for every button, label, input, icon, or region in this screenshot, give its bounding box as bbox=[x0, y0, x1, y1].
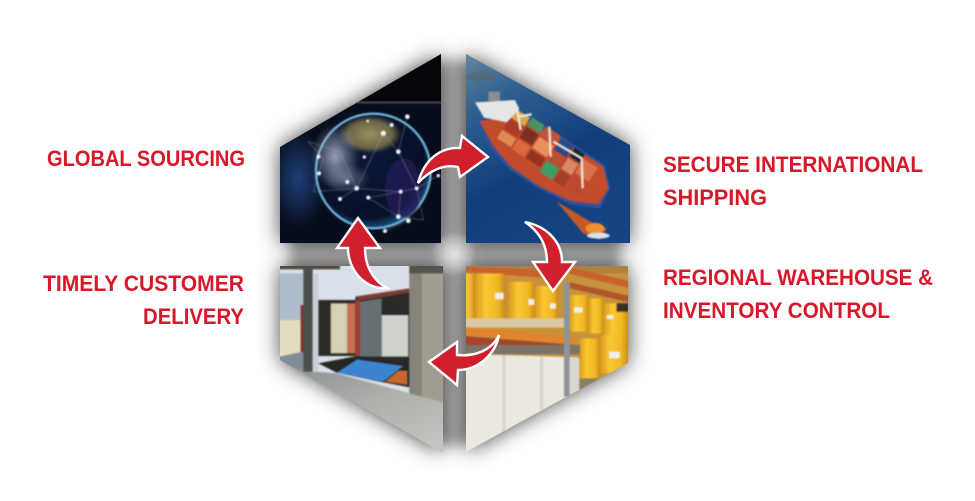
icon: white sacks bbox=[466, 352, 580, 452]
label: secure international shipping bbox=[663, 152, 923, 210]
arrow: delivery to globe bbox=[337, 218, 387, 288]
label: timely customer delivery: TIMELY CUSTOMER bbox=[43, 271, 244, 296]
icon: wake bbox=[557, 202, 610, 240]
label: regional warehouse and inventory control bbox=[663, 265, 933, 323]
label: timely customer delivery: DELIVERY bbox=[143, 304, 244, 329]
panel: secure international shipping vessel bbox=[466, 54, 630, 243]
icon: dock door pillar bbox=[408, 266, 443, 402]
icon: open container with goods bbox=[355, 288, 410, 363]
panel: regional warehouse and inventory bbox=[466, 266, 628, 452]
label: global sourcing: GLOBAL SOURCING bbox=[47, 146, 245, 171]
label: timely customer delivery bbox=[43, 271, 244, 329]
icon: yellow drums upper rack bbox=[457, 273, 628, 380]
icon: container ship bbox=[475, 92, 610, 208]
label: regional warehouse and inventory control: REGIONAL WAREHOUSE & bbox=[663, 265, 933, 290]
arrow: ship to warehouse bbox=[525, 222, 575, 291]
floor bbox=[290, 366, 443, 453]
panel: timely customer delivery container bbox=[280, 266, 443, 453]
icon: globe bbox=[308, 114, 440, 233]
panel: global sourcing globe bbox=[280, 54, 441, 243]
label: secure international shipping: SHIPPING bbox=[663, 185, 767, 210]
label: secure international shipping: SECURE INTERNATIONAL bbox=[663, 152, 923, 177]
label: regional warehouse and inventory control: INVENTORY CONTROL bbox=[663, 298, 890, 323]
hexagon drop shadows bbox=[280, 54, 630, 453]
icon: rack beams bbox=[453, 318, 580, 354]
arrow: globe to ship bbox=[418, 136, 488, 183]
arrow: warehouse to delivery bbox=[429, 335, 499, 385]
icon: blue loading ramp bbox=[337, 359, 407, 385]
icon: parked container bbox=[318, 300, 356, 356]
